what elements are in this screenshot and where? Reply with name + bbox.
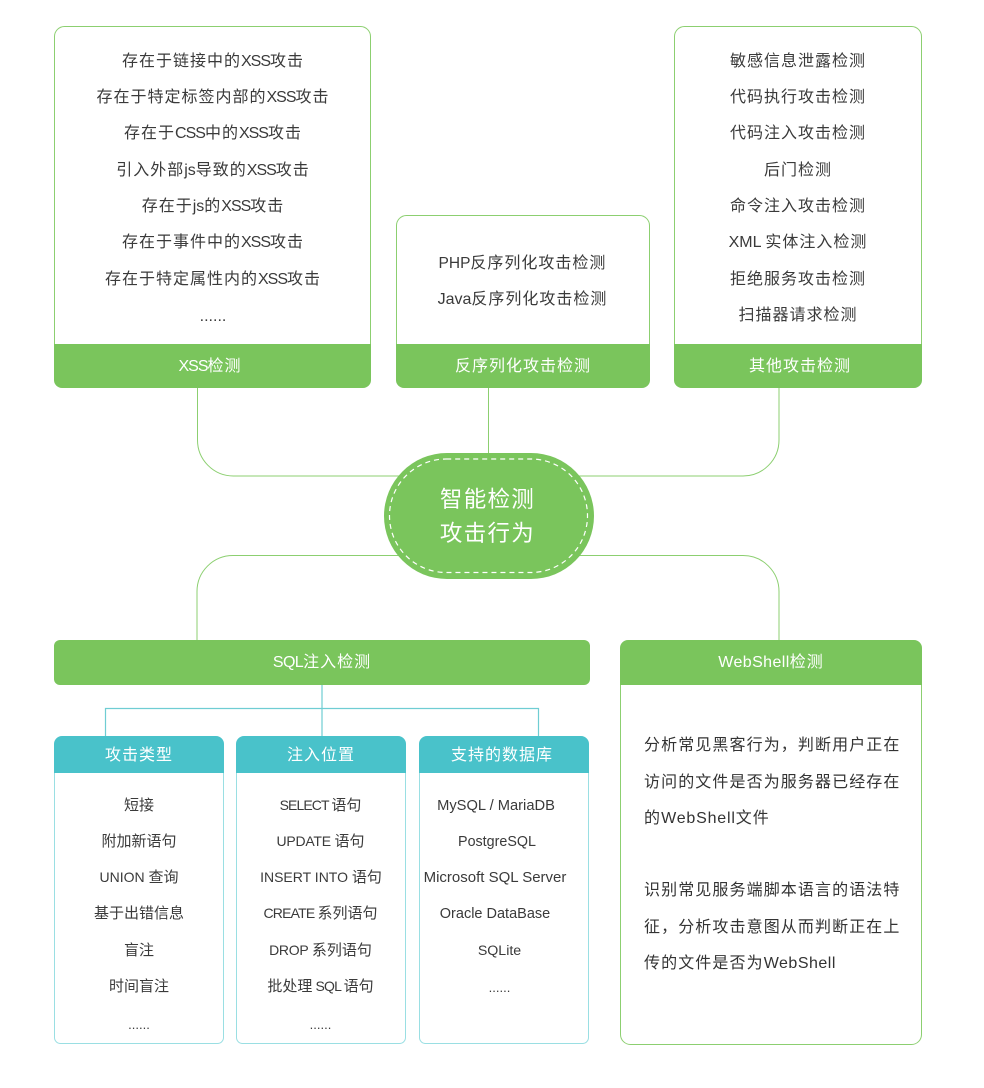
panel heading: deserialization [396,344,650,388]
sub heading: injection positions: 注入位置 [287,746,355,764]
list: other attack items [729,52,867,324]
list: other attack items: 拒绝服务攻击检测 [730,270,866,288]
list: attack types: 短接 [124,797,154,814]
panel: other attacks [674,26,922,388]
list: other attack items: 后门检测 [764,161,832,179]
list: XSS items: 存在于js的XSS攻击 [142,197,284,215]
connector: center to SQL [197,556,400,641]
list: injection positions: 批处理 SQL 语句 [267,978,374,995]
panel: attack types [54,736,224,1044]
text block: WebShell description 1: 访问的文件是否为服务器已经存在 [644,773,901,791]
list: other attack items: 扫描器请求检测 [738,306,858,324]
panel heading: SQL injection: SQL注入检测 [273,653,371,671]
list: deserialization items: PHP反序列化攻击检测 [439,254,606,272]
list: attack types: 基于出错信息 [94,905,184,922]
connector: deserialization to center [488,388,490,456]
panel heading: other attacks: 其他攻击检测 [749,357,851,375]
text block: WebShell description 2 [644,881,901,972]
text block: WebShell description 1: 分析常见黑客行为，判断用户正在 [644,736,901,754]
text block: WebShell description 1: 的WebShell文件 [644,809,770,827]
panel heading: other attacks [674,344,922,388]
list: supported databases: MySQL / MariaDB [437,798,555,814]
list: injection positions: CREATE 系列语句 [263,905,378,922]
panel heading: WebShell [620,640,922,685]
list: attack types: ...... [128,1017,150,1032]
list: XSS items: 存在于链接中的XSS攻击 [122,52,304,70]
list: XSS items: 引入外部js导致的XSS攻击 [116,161,310,179]
text block: WebShell description 1 [644,736,901,827]
panel heading: XSS: XSS检测 [178,357,242,375]
panel: injection positions [236,736,406,1044]
list: other attack items: 命令注入攻击检测 [730,197,866,215]
list: supported databases: Oracle DataBase [440,906,550,922]
panel: supported databases [419,736,589,1044]
list: deserialization items [438,254,607,308]
list: supported databases [424,798,566,995]
list: injection positions: DROP 系列语句 [269,942,372,959]
sub heading: attack types [54,736,224,773]
list: supported databases: SQLite [478,943,521,959]
list: attack types [94,797,184,1032]
list: injection positions: INSERT INTO 语句 [260,869,382,886]
list: XSS items [96,52,330,325]
connector: other attacks to center [575,388,779,476]
list: XSS items: 存在于特定标签内部的XSS攻击 [96,88,330,106]
panel heading: WebShell: WebShell检测 [718,653,824,671]
panel: WebShell [620,640,922,1044]
connector: XSS to center [198,388,400,476]
list: supported databases: ...... [489,980,510,995]
list: attack types: UNION 查询 [99,869,179,886]
panel heading: XSS [54,344,371,388]
list: attack types: 附加新语句 [101,833,177,850]
sub heading: attack types: 攻击类型 [105,746,173,764]
list: supported databases: PostgreSQL [458,834,536,850]
list: injection positions: UPDATE 语句 [277,833,364,850]
list: XSS items: 存在于事件中的XSS攻击 [122,233,304,251]
list: XSS items: ...... [200,308,226,325]
list: deserialization items: Java反序列化攻击检测 [438,290,607,308]
list: XSS items: 存在于特定属性内的XSS攻击 [105,270,321,288]
panel: deserialization [396,216,650,388]
sub heading: supported databases [419,736,589,773]
text block: WebShell description 2: 征，分析攻击意图从而判断正在上 [644,917,901,936]
text block: WebShell description 2: 识别常见服务端脚本语言的语法特 [644,881,901,899]
list: XSS items: 存在于CSS中的XSS攻击 [124,124,302,142]
panel: XSS [54,26,371,388]
center node: intelligent detection: 智能检测 [440,487,535,512]
text block: WebShell description 2: 传的文件是否为WebShell [644,954,836,972]
list: injection positions: SELECT 语句 [280,797,361,814]
sub heading: supported databases: 支持的数据库 [451,746,553,764]
connector: center to WebShell [575,556,779,641]
list: other attack items: 代码执行攻击检测 [730,88,866,106]
list: attack types: 盲注 [124,942,154,959]
list: other attack items: 代码注入攻击检测 [730,124,866,142]
list: injection positions: ...... [310,1017,331,1032]
panel heading: deserialization: 反序列化攻击检测 [455,357,591,375]
list: other attack items: 敏感信息泄露检测 [730,52,866,70]
sub heading: injection positions [236,736,406,773]
list: supported databases: Microsoft SQL Server [424,869,566,886]
panel heading: SQL injection [54,640,590,685]
center node: intelligent detection: 攻击行为 [440,521,535,546]
list: attack types: 时间盲注 [109,978,169,995]
list: injection positions [260,797,382,1032]
connector: SQL to sub panels [106,684,538,736]
list: other attack items: XML 实体注入检测 [729,233,867,251]
center node: intelligent detection [384,453,594,579]
